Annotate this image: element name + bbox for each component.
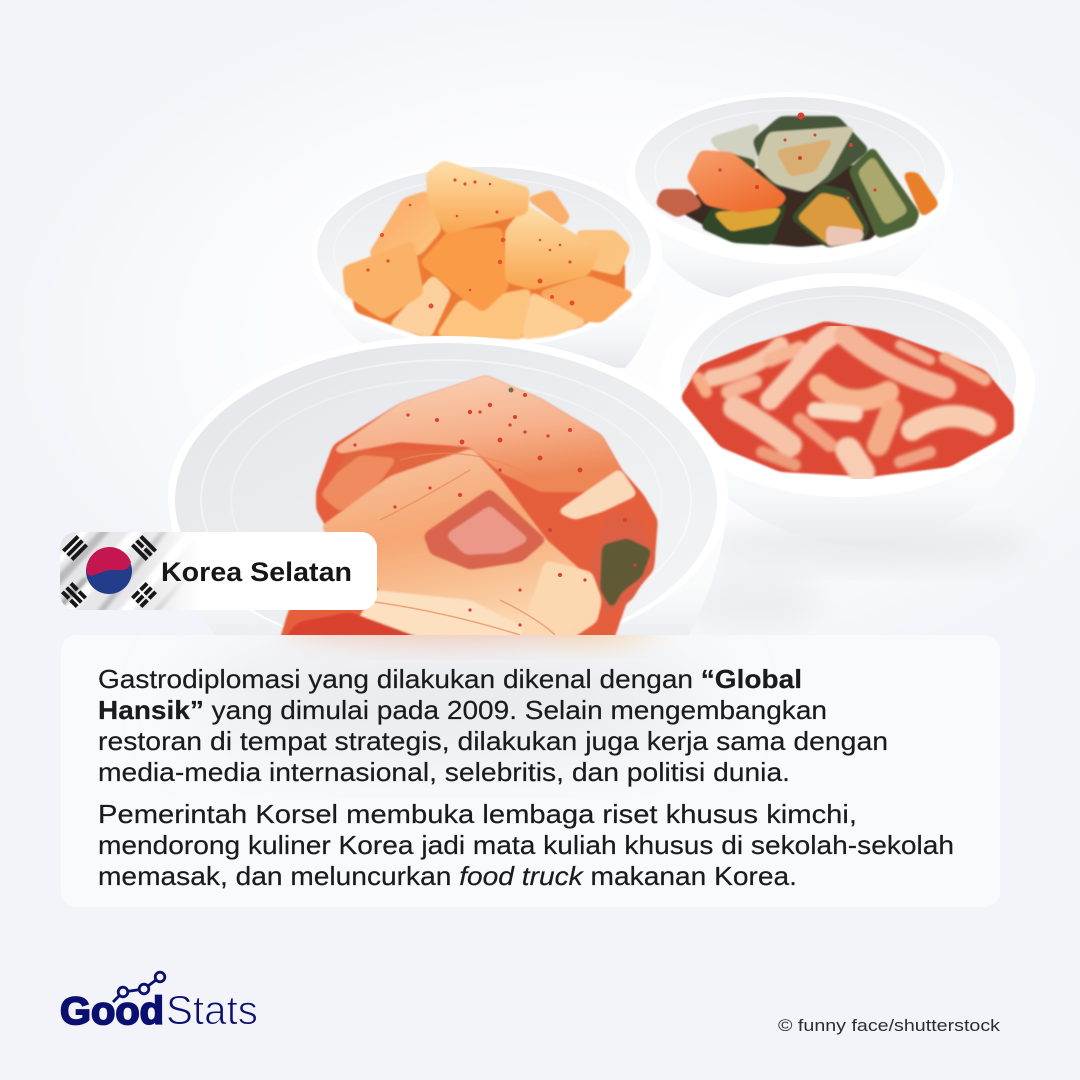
paragraph 2: mendorong kuliner Korea jadi mata kuliah khusus di sekolah-sekolah	[98, 830, 954, 860]
bowl: napa cabbage kimchi	[168, 336, 728, 658]
icon: rising line chart	[113, 972, 165, 1002]
photo credit: © funny face/shutterstock	[778, 1016, 1001, 1035]
paragraph 2: Pemerintah Korsel membuka lembaga riset khusus kimchi,	[98, 799, 857, 829]
logo: GoodStats: Stats	[166, 987, 258, 1033]
bowl: radish kkakdugi	[312, 160, 662, 368]
logo: GoodStats: Good	[60, 990, 164, 1033]
label text: Korea Selatan	[161, 557, 352, 587]
logo: GoodStats	[60, 972, 258, 1033]
paragraph 1: media-media internasional, selebritis, dan politisi dunia.	[98, 757, 790, 787]
paragraph 1: Gastrodiplomasi yang dilakukan dikenal dengan “Global	[98, 664, 802, 694]
paragraph 1	[98, 664, 888, 787]
paragraph 1: restoran di tempat strategis, dilakukan juga kerja sama dengan	[98, 726, 888, 756]
bowl: cucumber kimchi	[627, 92, 953, 299]
icon: four trigrams	[61, 535, 157, 608]
panel: description text	[99, 635, 952, 888]
photo: four bowls of Korean side dishes	[168, 92, 1035, 635]
paragraph 2	[98, 799, 954, 891]
country label: Korea Selatan	[60, 532, 377, 610]
icon: South Korean flag	[60, 532, 192, 610]
bowl: squid kimchi	[680, 273, 1016, 517]
icon: taegeuk circle	[86, 547, 132, 594]
paragraph 1: Hansik” yang dimulai pada 2009. Selain mengembangkan	[98, 695, 827, 725]
paragraph 2: memasak, dan meluncurkan food truck makanan Korea.	[98, 861, 797, 891]
